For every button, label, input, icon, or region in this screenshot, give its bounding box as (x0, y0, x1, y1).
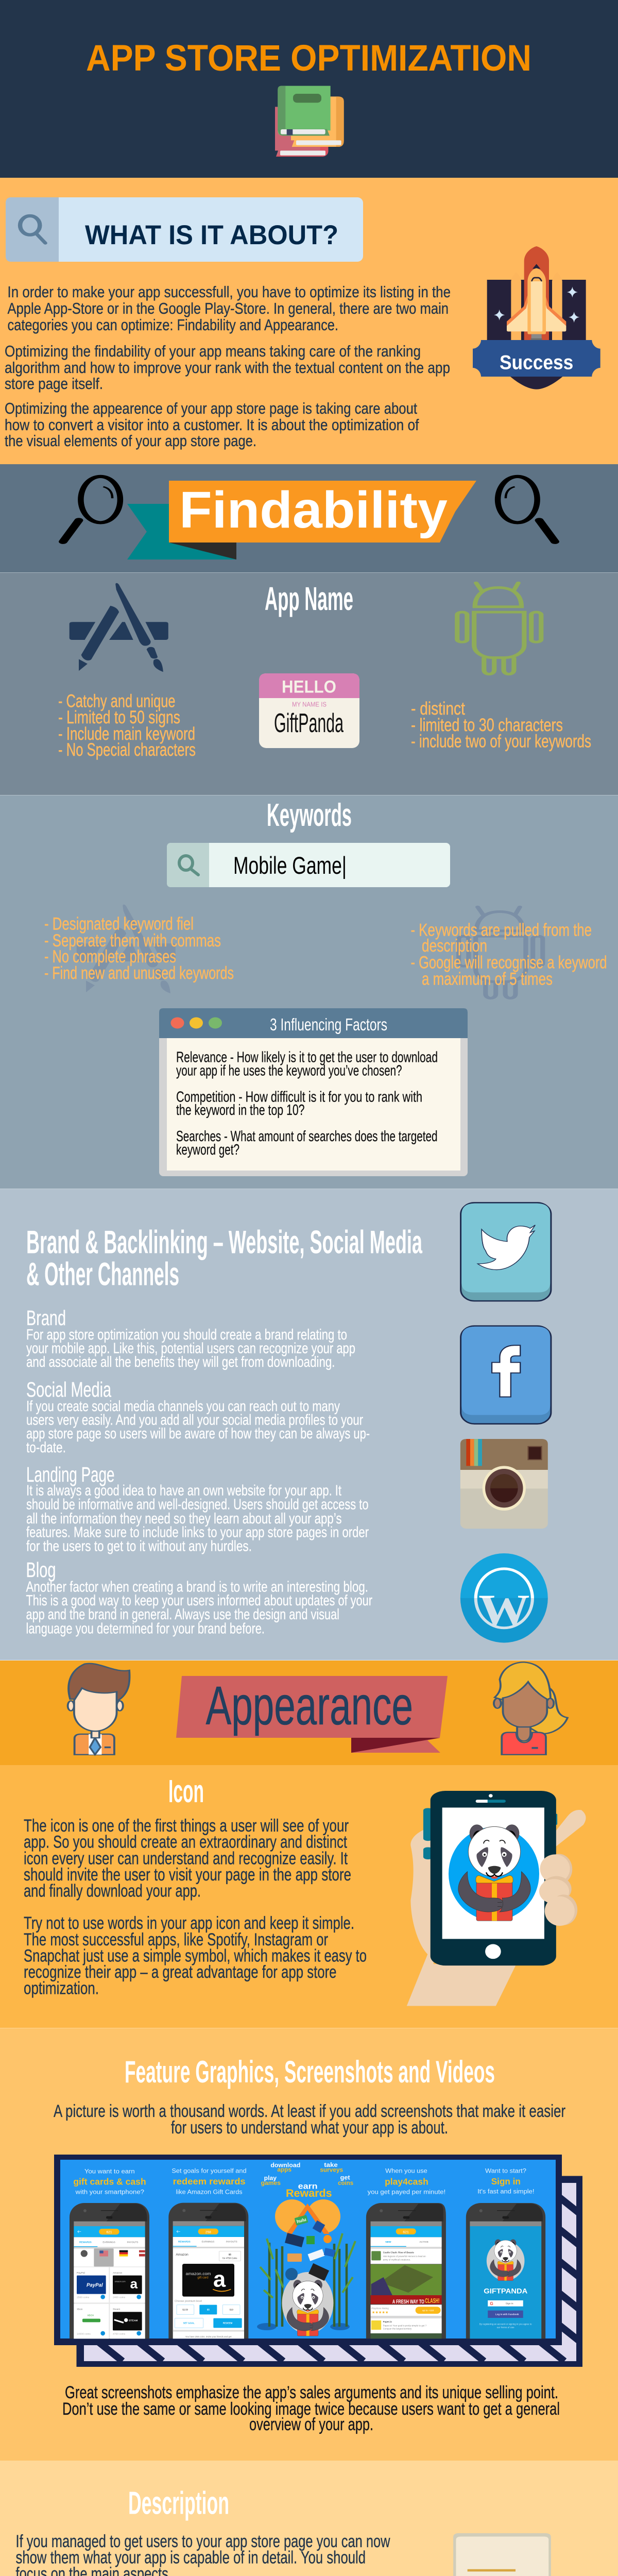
screenshot 1: gift cards and cash: a (130, 2276, 138, 2292)
screenshot 4: play4cash: A FRESH WAY TO (392, 2299, 424, 2305)
text block: icon advice: and finally download your app. (24, 1882, 201, 1901)
ribbon: findability (127, 481, 476, 560)
list: app store keywords: - Designated keyword fiel (44, 914, 194, 934)
panel: findability banner (0, 464, 618, 573)
screenshot 4: play4cash: up to +110 (422, 2309, 434, 2312)
screenshot 2: redeem rewards: REWARDS (178, 2241, 191, 2243)
screenshot 2: redeem rewards: You have 258 coins. Invite your friends and get (185, 2335, 232, 2338)
name tag: GiftPanda: MY NAME IS (292, 701, 327, 708)
window: 3 influencing factors: Searches - What amount of searches does the targeted (176, 1128, 438, 1145)
icon: instagram (460, 1439, 548, 1529)
screenshot 5: sign in: Sign in (491, 2176, 521, 2187)
screenshot 2: redeem rewards: amazon.com (186, 2271, 211, 2276)
screenshot 4: play4cash: army of mythical creatures. (383, 2258, 410, 2261)
text block: landing page: Landing Page (26, 1463, 114, 1486)
screenshot 1: gift cards and cash: REWARDS (79, 2241, 92, 2243)
window: 3 influencing factors: 3 Influencing Factors (270, 1015, 387, 1034)
icon: stack of books (275, 86, 344, 157)
window: 3 influencing factors (159, 1008, 468, 1176)
window: 3 influencing factors: keyword get? (176, 1142, 239, 1158)
list: google play keywords: description (422, 936, 487, 956)
ribbon: appearance (176, 1675, 448, 1753)
text block: brand: your mobile app. Like this, potential users can recognize your app (26, 1341, 355, 1357)
text block: social media: Social Media (26, 1378, 111, 1401)
icon: man avatar (68, 1664, 130, 1755)
search bar heading (6, 197, 363, 262)
screenshot 2: redeem rewards: redeem rewards (173, 2176, 246, 2187)
screenshot 1: gift cards and cash: Steam (113, 2308, 120, 2311)
screenshot 2: redeem rewards: $5 (229, 2253, 231, 2256)
screenshot 5: sign in: Want to start? (485, 2167, 526, 2174)
text block: intro: Optimizing the findability of your app means taking care of the ranking (5, 342, 421, 360)
screenshot 5: sign in: G (490, 2301, 493, 2306)
screenshot 5: sign in: By registering an account or signing in you agree to (479, 2323, 532, 2326)
screenshot 4: play4cash: Paper.io (383, 2320, 392, 2323)
list: google play rules: - limited to 30 characters (411, 715, 563, 735)
icon: left magnifier (63, 477, 120, 541)
screenshot 4: play4cash: ★★★★★ (372, 2311, 388, 2315)
screenshot 3: earn rewards: surveys (320, 2166, 343, 2174)
list: google play keywords (411, 920, 607, 989)
search field: Mobile Game| (233, 852, 347, 879)
screenshot 5: sign in: GIFTPANDA (484, 2287, 527, 2296)
screenshot 1: gift cards and cash: 14000 coins (77, 2333, 91, 2336)
screenshot 1: gift cards and cash: Xbox (77, 2308, 83, 2311)
striped back frame (76, 2176, 582, 2367)
text block: social media (26, 1378, 370, 1456)
screenshot 4: play4cash: Hire legions of powerful Heroes to lead an (383, 2255, 426, 2258)
text block: blog: Another factor when creating a brand is to write an interesting blog. (26, 1579, 368, 1595)
panel: keywords (0, 795, 618, 1189)
heading: icon: Icon (168, 1774, 204, 1809)
icon: faded android (459, 907, 543, 998)
text block: intro: store page itself. (5, 375, 103, 393)
screenshot 1: gift cards and cash: XBOX (87, 2314, 94, 2317)
icon: wordpress: W (478, 1585, 530, 1634)
text block: great screenshots: overview of your app. (249, 2415, 373, 2434)
text block: landing page: all the information they need so they learn about all your app’s (26, 1511, 342, 1527)
panel: icon (0, 1765, 618, 2028)
text block: great screenshots (62, 2383, 560, 2434)
screenshot 2: redeem rewards: a (213, 2267, 226, 2292)
text block: blog: This is a good way to keep your users informed about updates of your (26, 1592, 372, 1609)
text block: blog: Blog (26, 1558, 56, 1582)
icon: facebook (461, 1326, 551, 1424)
screenshot 4: play4cash: Castle Clash: Rise of Beasts (383, 2251, 414, 2254)
screenshot 2: redeem rewards: $5 (207, 2309, 210, 2311)
text block: icon advice: The icon is one of the first things a user will see of your (24, 1816, 349, 1836)
window: 3 influencing factors: your app if he uses the keyword you’ve chosen? (176, 1062, 402, 1079)
text block: icon advice: The most successful apps, like Spotify, Instagram or (24, 1930, 328, 1950)
screenshot 4: play4cash: ACTIVE (419, 2241, 428, 2244)
heading: description: Description (128, 2485, 229, 2521)
screenshot 2: redeem rewards: REDEEM (223, 2322, 233, 2325)
panel: what is it about (0, 178, 618, 464)
text block: blog (26, 1558, 372, 1637)
screenshot 1: gift cards and cash: with your smartphone? (75, 2188, 144, 2195)
icon: rocket success badge: Success (500, 351, 573, 374)
screenshot 2: redeem rewards: gift card (197, 2277, 209, 2280)
screenshot 2: redeem rewards: EARNINGS (202, 2241, 214, 2243)
screenshot 4: play4cash: When you use (385, 2167, 427, 2175)
search field (167, 843, 450, 887)
icon: magnifier (20, 216, 45, 243)
screenshot 1: gift cards and cash: 4750 coins (113, 2333, 126, 2336)
panel: app name (0, 573, 618, 795)
heading: keywords: Keywords (267, 798, 352, 833)
screenshot 3: earn rewards: play (264, 2175, 277, 2182)
text block: icon advice: app. So you should create an extraordinary and distinct (24, 1832, 347, 1852)
screenshot 4: play4cash: PlayStore Rating (371, 2307, 389, 2310)
text block: blog: app and the brand in general. Always use the design and visual (26, 1606, 339, 1623)
screenshot 3: earn rewards: games (261, 2179, 281, 2187)
icon: android (457, 583, 541, 674)
text block: icon advice: should invite the user to visit your page in the app store (24, 1865, 351, 1885)
text block: landing page: It is always a good idea to have an own website for your app. It (26, 1483, 341, 1499)
screenshot 2: redeem rewards (168, 2167, 248, 2338)
text block: intro: categories you can optimize: Findability and Appearance. (7, 316, 338, 334)
screenshot 3: earn rewards: coins (338, 2179, 353, 2187)
screenshot 2: redeem rewards: $2.50 (182, 2309, 188, 2311)
text block: landing page: features. Make sure to include links to your app store pages in order (26, 1524, 369, 1540)
heading: app name: App Name (265, 580, 353, 617)
screenshot 3: earn rewards: earn (298, 2182, 318, 2191)
screenshot 3: earn rewards: apps (277, 2166, 291, 2173)
screenshot 4: play4cash: CLASH! (425, 2297, 440, 2304)
text block: picture intro: for users to understand what your app is about. (171, 2118, 448, 2138)
screenshots frame (54, 2155, 562, 2345)
text block: intro: the visual elements of your app store page. (5, 432, 256, 450)
screenshot 1: gift cards and cash: STEAM (129, 2319, 138, 2323)
text block: icon advice (24, 1816, 367, 1998)
screenshot 1: gift cards and cash: gift cards & cash (73, 2177, 146, 2187)
screenshot 5: sign in: our Terms of Use (497, 2326, 514, 2329)
text block: icon advice: Try not to use words in your app icon and keep it simple. (24, 1913, 354, 1933)
list: google play keywords: a maximum of 5 times (422, 970, 553, 989)
screenshot 1: gift cards and cash: PayPal (87, 2282, 103, 2288)
text block: social media: app store page so users will be aware of how they can be always up- (26, 1426, 370, 1442)
text block: landing page: should be informative and well-designed. Users should get access to (26, 1496, 369, 1513)
text block: icon advice: recognize their app – a great advantage for app store (24, 1962, 337, 1982)
list: app store rules (58, 691, 196, 760)
text block: brand: Brand (26, 1306, 66, 1330)
icon: twitter (461, 1202, 551, 1301)
list: app store keywords (44, 914, 234, 983)
ribbon: findability: Findability (179, 481, 448, 539)
text block: picture intro (54, 2102, 565, 2138)
panel: feature graphics (0, 2028, 618, 2461)
screenshot 2: redeem rewards: Choose premium level (175, 2300, 202, 2303)
screenshot 4: play4cash: Paper.io! Your goal is pretty simple to get ? (383, 2324, 427, 2327)
list: app store rules: - Limited to 50 signs (58, 707, 180, 727)
screenshot 1: gift cards and cash: Amazon (113, 2272, 123, 2275)
screenshot 1: gift cards and cash: amazon.com (115, 2280, 126, 2282)
screenshot 2: redeem rewards: $10 (230, 2309, 234, 2311)
panel: description (0, 2461, 618, 2576)
text block: description advice: If you managed to get users to your app store page you can now (15, 2532, 390, 2551)
panel: appearance banner (0, 1660, 618, 1765)
screenshot 4: play4cash (366, 2167, 446, 2338)
list: app store rules: - Catchy and unique (58, 691, 175, 711)
text block: intro (5, 283, 451, 450)
text block: intro: In order to make your app successfull, you have to optimize its listing in the (7, 283, 451, 301)
screenshot 1: gift cards and cash: EARNINGS (102, 2241, 115, 2243)
screenshot 4: play4cash: NEW (385, 2241, 391, 2244)
list: app store rules: - No Special characters (58, 740, 196, 760)
search bar heading: WHAT IS IT ABOUT? (85, 220, 338, 250)
panel: brand and backlinking (0, 1189, 618, 1660)
icon: rocket success badge (473, 246, 600, 389)
heading: brand and backlinking: & Other Channels (26, 1256, 179, 1292)
text block: social media: users very easily. And you add all your social media profiles to your (26, 1412, 363, 1428)
screenshot 1: gift cards and cash: 2500 coins (77, 2296, 90, 2299)
screenshot 1: gift cards and cash: PayPal (77, 2272, 85, 2275)
ribbon: appearance: Appearance (206, 1675, 413, 1736)
screenshot 5: sign in (466, 2167, 545, 2338)
screenshot 3: earn rewards: Rewards (286, 2187, 332, 2199)
screenshot 2: redeem rewards: SET GOAL (183, 2322, 195, 2325)
text block: intro: Apple App-Store or in the Google Play-Store. In general, there are two main (7, 299, 449, 317)
list: app store keywords: - No complete phrases (44, 947, 176, 967)
screenshot 4: play4cash: 621 (403, 2230, 409, 2234)
icon: woman avatar (494, 1662, 568, 1755)
screenshot 1: gift cards and cash (70, 2167, 149, 2338)
list: google play rules (411, 699, 591, 751)
text block: icon advice: icon every user can understand and recognize easily. It (24, 1849, 348, 1868)
icon: hand holding phone with panda (407, 1791, 586, 2006)
icon: wordpress (460, 1553, 548, 1642)
text block: intro: Optimizing the appearence of your app store page is taking care about (5, 399, 417, 417)
text block: social media: to-date. (26, 1439, 66, 1456)
screenshot 2: redeem rewards: for 4750 Coins (222, 2257, 237, 2259)
heading: brand and backlinking (26, 1224, 423, 1292)
screenshot 5: sign in: It's fast and simple! (477, 2188, 534, 2195)
screenshot 5: sign in: Log in with Facebook (495, 2313, 519, 2316)
list: app store keywords: - Find new and unused keywords (44, 963, 234, 983)
screenshot 3: earn rewards: take (324, 2161, 338, 2168)
screenshot 2: redeem rewards: Set goals for yourself and (171, 2167, 247, 2175)
screenshot 2: redeem rewards: PAYOUTS (226, 2241, 237, 2243)
text block: intro: how to convert a visitor into a customer. It is about the optimization of (5, 416, 419, 434)
screenshot 3: earn rewards: get (340, 2174, 350, 2181)
screenshot 1: gift cards and cash: You want to earn (84, 2167, 135, 2175)
window: 3 influencing factors: the keyword in the top 10? (176, 1102, 305, 1118)
list: app store keywords: - Seperate them with commas (44, 931, 221, 951)
screenshot 3: earn rewards (257, 2161, 355, 2336)
window: 3 influencing factors: Competition - How difficult is it for you to rank with (176, 1089, 422, 1106)
screenshot 3: earn rewards: download (270, 2162, 300, 2169)
text block: icon advice: Snapchat just use a simple symbol, which makes it easy to (24, 1946, 367, 1966)
text block: brand: and associate all the benefits they will get from downloading. (26, 1354, 335, 1370)
title: APP STORE OPTIMIZATION (86, 38, 531, 79)
text block: description advice (15, 2532, 400, 2576)
text block: social media: If you create social media channels you can reach out to many (26, 1398, 340, 1415)
icon: faded app store (77, 905, 176, 993)
screenshot 2: redeem rewards: Amazon (176, 2253, 188, 2257)
screenshot 5: sign in: Sign in (506, 2302, 513, 2305)
screenshot 4: play4cash: play4cash (385, 2177, 428, 2187)
screenshot 2: redeem rewards: like Amazon Gift Cards (176, 2188, 243, 2195)
panel: header (0, 0, 618, 178)
text block: description advice: show them what your app is capable of in detail. You should (15, 2548, 366, 2568)
icon: app store (70, 583, 168, 672)
list: app store rules: - Include main keyword (58, 724, 195, 744)
text block: icon advice: optimization. (24, 1978, 99, 1998)
text block: landing page: for the users to get to it without any hurdles. (26, 1538, 252, 1555)
text block: landing page (26, 1463, 369, 1555)
icon: typewriter (420, 2533, 584, 2576)
screenshot 1: gift cards and cash: 621 (106, 2231, 112, 2234)
screenshot 4: play4cash: you get payed per minute! (368, 2189, 445, 2195)
screenshot 3: earn rewards: hulu (296, 2217, 307, 2224)
screenshot 2: redeem rewards: 258 (205, 2230, 211, 2234)
name tag: GiftPanda: HELLO (282, 677, 336, 697)
screenshot 1: gift cards and cash: PAYOUTS (127, 2241, 138, 2243)
name tag: GiftPanda: GiftPanda (274, 708, 344, 738)
name tag: GiftPanda (259, 673, 359, 748)
window: 3 influencing factors: Relevance - How likely is it to get the user to download (176, 1049, 438, 1065)
icon: right magnifier (498, 477, 555, 541)
text block: brand (26, 1306, 355, 1370)
screenshot 1: gift cards and cash: 2400 coins (113, 2296, 126, 2299)
text block: brand: For app store optimization you should create a brand relating to (26, 1327, 347, 1343)
screenshot 4: play4cash: Conquer the largest territory (383, 2328, 412, 2330)
text block: intro: algorithm and how to improve your rank with the textual content on the app (5, 359, 450, 377)
list: google play rules: - distinct (411, 699, 465, 719)
text block: blog: language you determined for your brand before. (26, 1621, 265, 1637)
